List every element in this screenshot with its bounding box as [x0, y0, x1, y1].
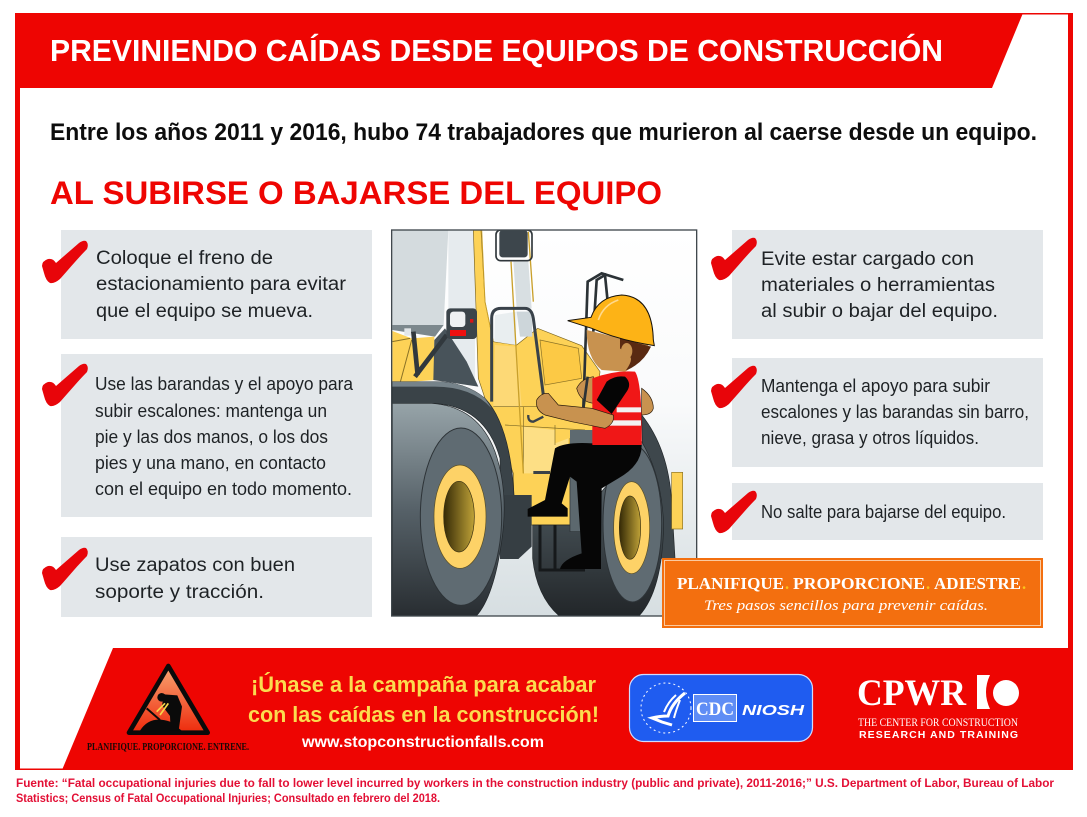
callout: plan provide train: .: [926, 574, 930, 593]
illustration: worker climbing loader: [392, 230, 697, 617]
tip: parking brake: Coloque el freno de: [96, 248, 273, 269]
tip: footwear: Use zapatos con buen: [95, 555, 295, 576]
tip: do not carry loads: materiales o herramientas: [761, 275, 995, 296]
worker vest: [592, 371, 642, 445]
front wheel: [392, 403, 504, 617]
source note: Fuente: “Fatal occupational injuries due to fall to lower level incurred by workers in the construction industry (public and private), 2011-2016;” U.S. Department of Labor, Bureau of Labor: [16, 777, 1054, 790]
callout: plan provide train: ADIESTRE: [934, 574, 1021, 593]
tip: parking brake: que el equipo se mueva.: [96, 301, 313, 322]
callout: plan provide train: .: [785, 574, 789, 593]
tip: do not jump: [711, 483, 1043, 540]
side mirror: [446, 308, 477, 339]
callout: plan provide train: PROPORCIONE: [793, 574, 925, 593]
logo: CPWR: CPWR: [857, 673, 967, 714]
tip: keep steps clean: escalones y las barandas sin barro,: [761, 402, 1029, 422]
tip: keep steps clean: nieve, grasa y otros líquidos.: [761, 428, 979, 448]
logo: CPWR: [857, 673, 1019, 741]
tip: three points of contact: Use las barandas y el apoyo para: [95, 374, 354, 394]
tip: footwear: soporte y tracción.: [95, 582, 264, 603]
tip: three points of contact: pies y una mano, en contacto: [95, 453, 326, 473]
section heading: AL SUBIRSE O BAJARSE DEL EQUIPO: [50, 175, 662, 211]
tip: do not carry loads: [711, 230, 1043, 339]
campaign motto: PLANIFIQUE. PROPORCIONE. ENTRENE.: [87, 742, 249, 753]
cab body: [473, 230, 600, 525]
title: PREVINIENDO CAÍDAS DESDE EQUIPOS DE CONSTRUCCIÓN: [50, 32, 943, 68]
worker rail: [583, 273, 623, 408]
tip: do not carry loads: Evite estar cargado con: [761, 249, 974, 270]
footer banner: con las caídas en la construcción!: [248, 702, 599, 727]
hard hat: [568, 295, 654, 346]
tip: three points of contact: con el equipo en todo momento.: [95, 479, 352, 499]
icon: HHS eagle: [641, 683, 691, 733]
worker far arm: [642, 388, 653, 415]
tip: parking brake: [42, 230, 372, 339]
tip: three points of contact: pie y las dos manos, o los dos: [95, 427, 328, 447]
source note: [16, 777, 1054, 805]
door handrail: [492, 308, 543, 402]
icon: NIOSH: NIOSH: [742, 702, 806, 719]
header banner: [15, 13, 1023, 88]
logo: CPWR: RESEARCH AND TRAINING: [859, 729, 1018, 741]
tip: footwear: [42, 537, 372, 617]
tip: three points of contact: subir escalones: mantenga un: [95, 401, 327, 421]
statistic statement: Entre los años 2011 y 2016, hubo 74 trabajadores que murieron al caerse desde un equipo.: [50, 119, 1037, 146]
tip: keep steps clean: [711, 358, 1043, 467]
rear fender and wheel: [642, 415, 675, 558]
top mirror: [496, 230, 532, 261]
logo: CPWR: THE CENTER FOR CONSTRUCTION: [858, 717, 1019, 729]
left yellow engine: [392, 331, 434, 383]
steps: [570, 476, 580, 532]
tip: do not carry loads: al subir o bajar del equipo.: [761, 301, 998, 322]
icon: CDC: CDC: [696, 699, 734, 720]
callout: plan provide train: .: [1022, 574, 1026, 593]
source note: Statistics; Census of Fatal Occupational Injuries; Consultado en febrero del 2018.: [16, 792, 440, 805]
icon: campaign warning triangle: [129, 666, 208, 733]
tip: parking brake: estacionamiento para evitar: [96, 274, 347, 295]
tip: keep steps clean: Mantenga el apoyo para subir: [761, 376, 990, 396]
tip: three points of contact: [42, 354, 372, 517]
worker head: [587, 330, 648, 372]
callout: plan provide train: [662, 558, 1043, 628]
worker near arm: [536, 393, 614, 428]
call to action: ¡Únase a la campaña para acabar: [251, 672, 596, 697]
callout: plan provide train: Tres pasos sencillos para prevenir caídas.: [704, 598, 988, 614]
front fender: [392, 382, 518, 558]
campaign website: www.stopconstructionfalls.com: [301, 734, 544, 751]
footer banner: [15, 648, 1073, 770]
callout: plan provide train: PLANIFIQUE: [677, 574, 784, 593]
worker legs: [528, 443, 642, 569]
tip: do not jump: No salte para bajarse del equipo.: [761, 502, 1006, 522]
logos: HHS CDC NIOSH: [630, 674, 812, 742]
